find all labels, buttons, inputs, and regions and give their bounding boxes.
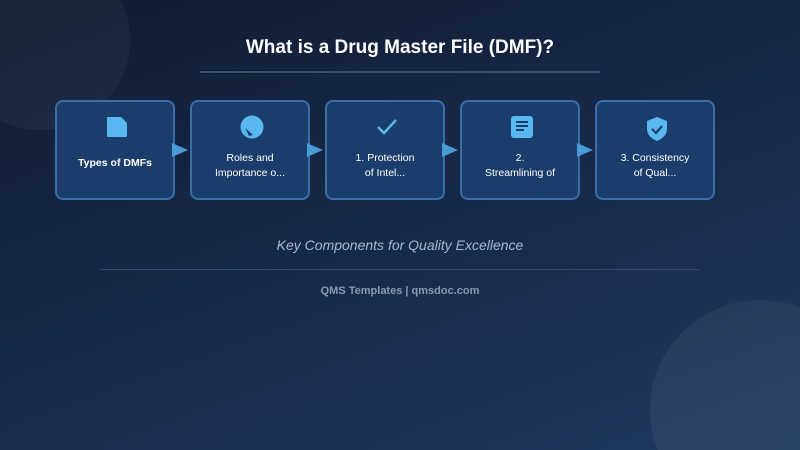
step 5: Consistency: 3. Consistency xyxy=(621,152,689,164)
footer: QMS Templates | qmsdoc.com xyxy=(321,285,479,297)
step 5: Consistency: of Qual... xyxy=(634,167,676,179)
step 2: Roles: Roles and xyxy=(226,152,274,164)
arrow 1 xyxy=(172,143,188,157)
icon: file xyxy=(107,117,127,137)
icon: check xyxy=(377,119,397,135)
step 3: Protection: 1. Protection xyxy=(356,152,414,164)
step 3: Protection: of Intel... xyxy=(365,167,405,179)
arrow 3 xyxy=(442,143,458,157)
step 3: Protection xyxy=(325,100,445,200)
step 4: Streamlining: 2. xyxy=(516,152,524,164)
subtitle: Key Components for Quality Excellence xyxy=(277,237,523,253)
step 1: Types of DMFs: Types of DMFs xyxy=(78,157,152,169)
step 2: Roles: Importance o... xyxy=(215,167,285,179)
arrow 4 xyxy=(577,143,593,157)
icon: shield xyxy=(647,117,667,141)
icon: pie xyxy=(240,116,264,138)
icon: document xyxy=(511,116,533,138)
step 4: Streamlining: Streamlining of xyxy=(485,167,555,179)
step 2: Roles xyxy=(190,100,310,200)
step 5: Consistency xyxy=(595,100,715,200)
step 1: Types of DMFs xyxy=(55,100,175,200)
step 4: Streamlining xyxy=(460,100,580,200)
arrow 2 xyxy=(307,143,323,157)
title: What is a Drug Master File (DMF)? xyxy=(246,37,554,58)
